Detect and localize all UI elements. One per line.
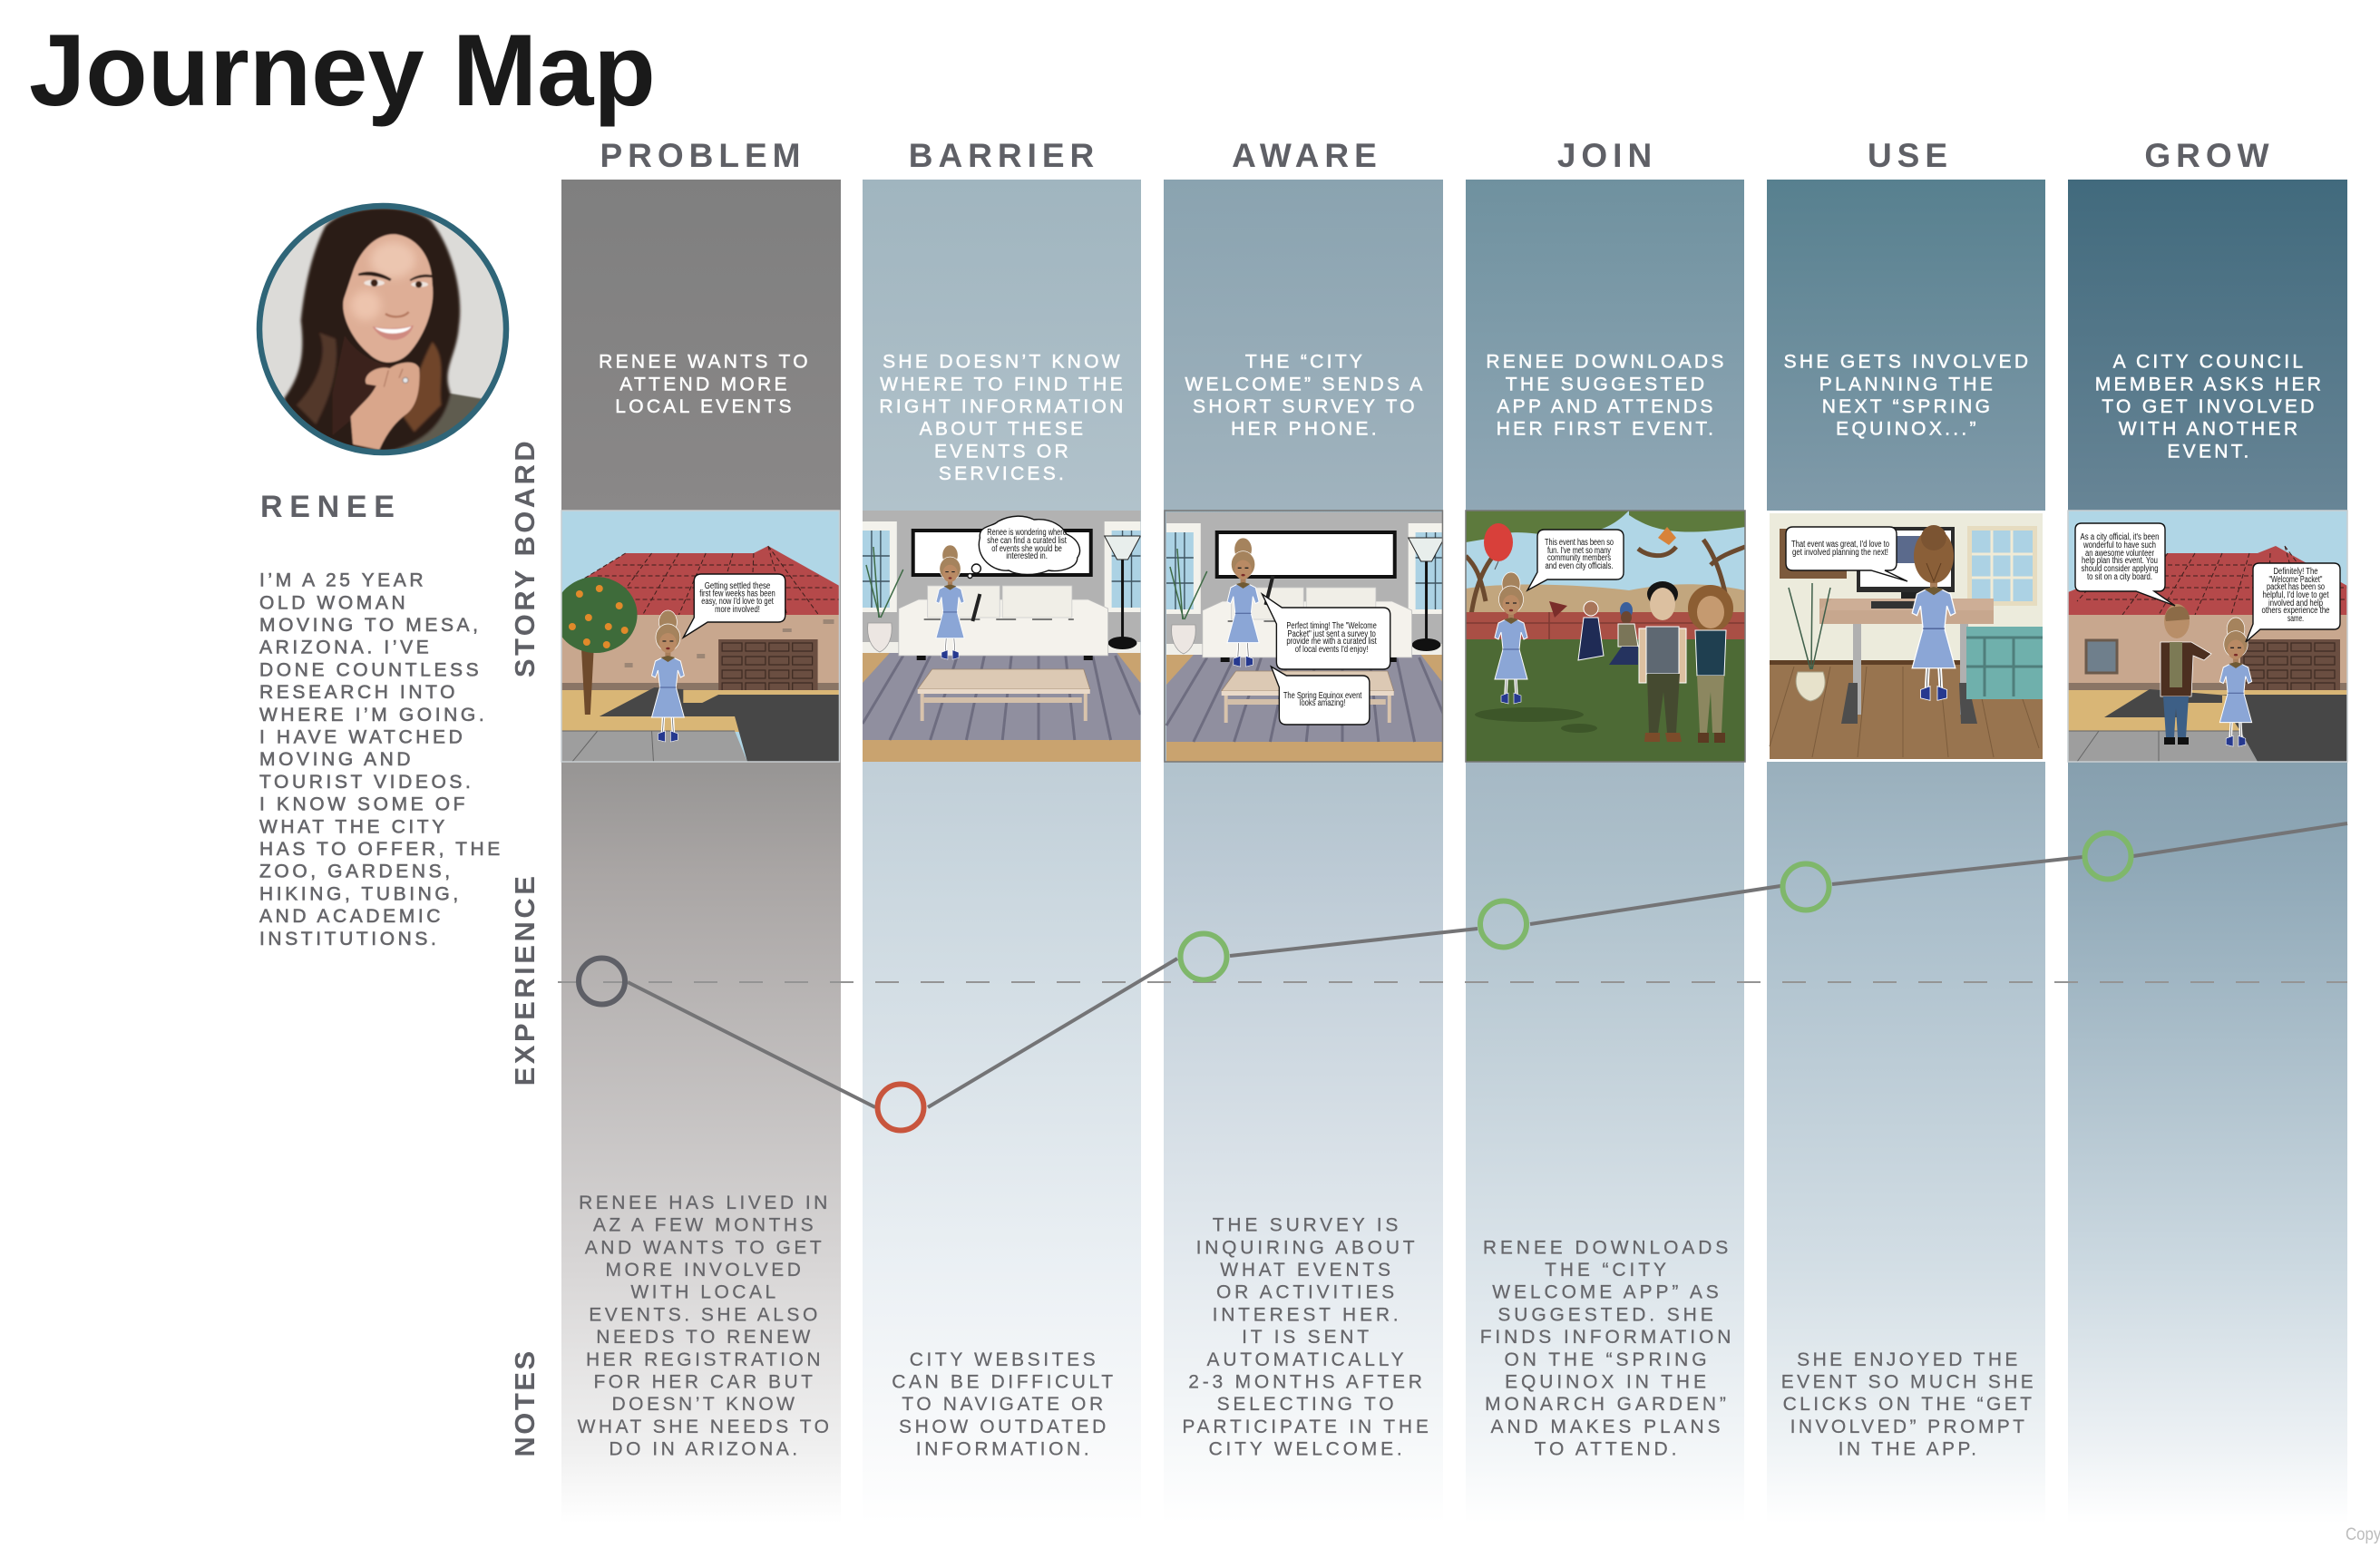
note: ON THE “SPRING — [1505, 1349, 1710, 1370]
chart: experience curve — [558, 823, 2347, 1130]
speech bubble: spring equinox: The Spring Equinox event — [1283, 691, 1362, 701]
note: AZ A FEW MONTHS — [593, 1215, 816, 1236]
speech bubble: first few weeks has been — [699, 589, 775, 599]
caption: HER PHONE. — [1231, 419, 1380, 440]
caption: LOCAL EVENTS — [615, 396, 795, 417]
standing woman — [1688, 585, 1733, 743]
note: OR ACTIVITIES — [1216, 1282, 1398, 1303]
caption: EQUINOX...” — [1836, 419, 1979, 440]
note: WITH LOCAL — [630, 1282, 779, 1303]
thought bubble — [968, 516, 1079, 579]
persona bio: I HAVE WATCHED — [259, 727, 465, 747]
caption — [1784, 352, 2031, 440]
speech bubble: Renee: others experience the — [2262, 606, 2330, 616]
storyboard: house, Renee settling in — [554, 511, 839, 762]
note: NEEDS TO RENEW — [596, 1327, 814, 1348]
note: SUGGESTED. SHE — [1497, 1304, 1717, 1325]
persona bio: HIKING, TUBING, — [259, 883, 462, 904]
caption: WHERE TO FIND THE — [880, 374, 1126, 394]
speech bubble: community members — [1547, 553, 1611, 563]
plant — [1789, 583, 1830, 701]
note: THE SURVEY IS — [1213, 1215, 1401, 1236]
persona bio: WHERE I’M GOING. — [259, 705, 487, 725]
character: city official — [2161, 604, 2211, 745]
heading: join: JOIN — [1557, 137, 1657, 174]
note: CITY WELCOME. — [1208, 1439, 1406, 1460]
note: SELECTING TO — [1217, 1394, 1397, 1415]
standing man — [1639, 581, 1686, 742]
marker: problem — [579, 958, 625, 1005]
speech bubble: more involved! — [715, 605, 760, 615]
balloon — [1484, 523, 1513, 570]
note: INFORMATION. — [916, 1439, 1092, 1460]
caption: NEXT “SPRING — [1822, 396, 1993, 417]
panel: join column — [1466, 137, 1744, 1524]
note: FINDS INFORMATION — [1480, 1327, 1734, 1348]
caption: RENEE WANTS TO — [599, 352, 811, 373]
note: CITY WEBSITES — [910, 1349, 1098, 1370]
note: SHE ENJOYED THE — [1797, 1349, 2021, 1370]
speech bubble: That event was great, I'd love to — [1791, 540, 1889, 550]
persona bio: I KNOW SOME OF — [259, 794, 468, 815]
speech bubble: official: help plan this event. You — [2082, 556, 2158, 566]
note: AND MAKES PLANS — [1491, 1417, 1723, 1437]
note: AND WANTS TO GET — [585, 1237, 824, 1258]
speech bubble: Renee: Definitely! The — [2273, 567, 2318, 577]
persona name: RENEE — [260, 490, 402, 524]
note: TO NAVIGATE OR — [902, 1394, 1107, 1415]
storyboard: office, planning — [1767, 511, 2046, 762]
column background — [1466, 180, 1744, 1524]
panel: problem column — [561, 137, 841, 1524]
marker: join — [1480, 901, 1527, 947]
caption: APP AND ATTENDS — [1497, 396, 1716, 417]
note: DO IN ARIZONA. — [609, 1439, 801, 1460]
caption: SHE GETS INVOLVED — [1784, 352, 2031, 373]
caption — [1185, 352, 1426, 440]
note: EVENTS. SHE ALSO — [589, 1304, 821, 1325]
note: RENEE DOWNLOADS — [1483, 1237, 1731, 1258]
speech bubble: survey: Packet" just sent a survey to — [1287, 629, 1376, 639]
persona bio — [259, 570, 503, 949]
speech bubble: Renee: helpful, I'd love to get — [2262, 590, 2329, 600]
caption: EVENT. — [2167, 441, 2252, 462]
persona bio: ARIZONA. I’VE — [259, 638, 432, 658]
note: IT IS SENT — [1242, 1327, 1372, 1348]
caption: SHE DOESN’T KNOW — [883, 352, 1123, 373]
persona bio: HAS TO OFFER, THE — [259, 839, 503, 860]
speech bubble: survey — [1262, 594, 1390, 669]
persona bio: TOURIST VIDEOS. — [259, 772, 473, 793]
row label: experience: EXPERIENCE — [509, 873, 541, 1086]
speech bubble: Renee: "Welcome Packet" — [2269, 575, 2323, 585]
speech bubble: survey: Perfect timing! The "Welcome — [1286, 621, 1377, 631]
speech bubble: spring equinox — [1271, 667, 1370, 725]
caption: PLANNING THE — [1819, 374, 1995, 394]
column background — [1164, 180, 1443, 1524]
character: Renee — [1495, 572, 1527, 704]
caption — [1486, 352, 1727, 440]
character: Renee — [2219, 618, 2252, 746]
note: PARTICIPATE IN THE — [1182, 1417, 1432, 1437]
persona bio: AND ACADEMIC — [259, 906, 444, 927]
note: WELCOME APP” AS — [1492, 1282, 1722, 1303]
caption — [599, 352, 811, 417]
speech bubble — [1786, 527, 1907, 581]
caption: MEMBER ASKS HER — [2095, 374, 2324, 394]
marker: aware — [1181, 934, 1226, 979]
note: DOESN’T KNOW — [612, 1394, 797, 1415]
note: IN THE APP. — [1839, 1439, 1979, 1460]
persona bio: INSTITUTIONS. — [259, 929, 439, 949]
thought bubble: of events she would be — [991, 544, 1062, 554]
speech bubble: survey: provide me with a curated list — [1286, 637, 1377, 647]
marker: grow — [2084, 833, 2131, 880]
caption: WITH ANOTHER — [2119, 419, 2300, 440]
persona bio: ZOO, GARDENS, — [259, 862, 454, 882]
persona bio: MOVING AND — [259, 749, 414, 770]
caption: HER FIRST EVENT. — [1497, 419, 1716, 440]
caption: SERVICES. — [939, 463, 1067, 484]
note: RENEE HAS LIVED IN — [579, 1193, 831, 1213]
note: SHOW OUTDATED — [899, 1417, 1109, 1437]
speech bubble — [683, 574, 785, 638]
caption: SHORT SURVEY TO — [1193, 396, 1418, 417]
note: WHAT EVENTS — [1220, 1260, 1394, 1280]
caption: RENEE DOWNLOADS — [1486, 352, 1727, 373]
heading: aware: AWARE — [1232, 137, 1382, 174]
note: AUTOMATICALLY — [1207, 1349, 1407, 1370]
note — [892, 1349, 1117, 1460]
persona bio: OLD WOMAN — [259, 592, 408, 613]
speech bubble: official — [2075, 523, 2175, 606]
caption: RIGHT INFORMATION — [879, 396, 1127, 417]
character: Renee from behind — [1912, 525, 1956, 700]
note: INTEREST HER. — [1213, 1304, 1401, 1325]
panel: barrier column — [863, 137, 1141, 1524]
caption: THE SUGGESTED — [1506, 374, 1707, 394]
speech bubble: and even city officials. — [1546, 561, 1613, 571]
note — [1182, 1215, 1432, 1460]
thought bubble: she can find a curated list — [987, 536, 1067, 546]
storyboard: house, council member — [2068, 511, 2356, 762]
row label: story board: STORY BOARD — [509, 438, 541, 677]
speech bubble: Renee: packet has been so — [2267, 582, 2325, 592]
heading: problem: PROBLEM — [600, 137, 805, 174]
speech bubble: Renee — [2246, 563, 2340, 642]
panel: persona — [259, 206, 506, 949]
speech bubble: easy, now I'd love to get — [701, 597, 774, 607]
note: INQUIRING ABOUT — [1196, 1237, 1418, 1258]
column background — [863, 180, 1141, 1524]
speech bubble: Renee: same. — [2287, 614, 2304, 624]
storyboard: living room, Renee wondering — [863, 511, 1140, 762]
column background — [2068, 180, 2347, 1524]
persona bio: RESEARCH INTO — [259, 682, 458, 703]
character: Renee — [936, 545, 964, 659]
caption: TO GET INVOLVED — [2102, 396, 2317, 417]
speech bubble: spring equinox: looks amazing! — [1300, 698, 1345, 708]
seated guests — [1578, 601, 1638, 665]
heading: barrier: BARRIER — [909, 137, 1099, 174]
note: HER REGISTRATION — [586, 1349, 824, 1370]
speech bubble: official: wonderful to have such — [2082, 540, 2156, 550]
note: INVOLVED” PROMPT — [1790, 1417, 2027, 1437]
speech bubble: This event has been so — [1545, 538, 1614, 548]
heading: use: USE — [1868, 137, 1953, 174]
caption: THE “CITY — [1245, 352, 1365, 373]
column background — [1767, 180, 2045, 1524]
note: MONARCH GARDEN” — [1485, 1394, 1730, 1415]
note: EVENT SO MUCH SHE — [1781, 1371, 2036, 1393]
character: Renee — [651, 610, 684, 742]
caption: A CITY COUNCIL — [2113, 352, 2306, 373]
speech bubble: official: should consider applying — [2081, 564, 2159, 574]
note: THE “CITY — [1545, 1260, 1670, 1280]
thought bubble: Renee is wondering where — [987, 528, 1067, 538]
caption: ATTEND MORE — [619, 374, 790, 394]
panel: use column — [1767, 137, 2045, 1524]
note: CAN BE DIFFICULT — [892, 1371, 1117, 1393]
caption: WELCOME” SENDS A — [1185, 374, 1426, 394]
note: WHAT SHE NEEDS TO — [578, 1417, 832, 1437]
note — [1480, 1237, 1734, 1460]
note — [1781, 1349, 2036, 1460]
persona bio: WHAT THE CITY — [259, 816, 448, 837]
character: Renee — [1227, 538, 1259, 667]
portrait photo — [259, 206, 506, 453]
column background — [561, 180, 841, 1524]
note: TO ATTEND. — [1535, 1439, 1680, 1460]
storyboard: living room, survey arrives — [1165, 511, 1444, 764]
caption: ABOUT THESE — [920, 419, 1086, 440]
marker: use — [1783, 863, 1829, 910]
speech bubble: survey: of local events I'd enjoy! — [1295, 645, 1368, 655]
speech bubble — [1527, 530, 1624, 590]
heading: grow: GROW — [2144, 137, 2275, 174]
caption — [879, 352, 1127, 484]
speech bubble: official: As a city official, it's been — [2081, 532, 2159, 542]
caption — [2095, 352, 2324, 462]
note: EQUINOX IN THE — [1505, 1371, 1710, 1393]
note — [578, 1193, 832, 1460]
note: FOR HER CAR BUT — [593, 1371, 816, 1393]
row label: notes: NOTES — [509, 1349, 541, 1457]
persona bio: MOVING TO MESA, — [259, 615, 482, 636]
speech bubble: Renee: involved and help — [2268, 599, 2323, 609]
panel: grow column — [2068, 137, 2347, 1524]
note: 2-3 MONTHS AFTER — [1188, 1371, 1426, 1393]
note: CLICKS ON THE “GET — [1783, 1394, 2034, 1415]
marker: barrier — [878, 1085, 923, 1130]
speech bubble: get involved planning the next! — [1792, 548, 1888, 558]
persona bio: I’M A 25 YEAR — [259, 570, 426, 591]
speech bubble: fun. I've met so many — [1547, 546, 1611, 556]
speech bubble: official: to sit on a city board. — [2087, 572, 2152, 582]
storyboard: park event — [1466, 511, 1745, 762]
persona bio: DONE COUNTLESS — [259, 659, 482, 680]
speech bubble: Getting settled these — [705, 581, 771, 591]
note: MORE INVOLVED — [606, 1260, 804, 1280]
speech bubble: official: an awesome volunteer — [2085, 549, 2154, 559]
title: Journey Map — [29, 14, 656, 127]
panel: aware column — [1164, 137, 1443, 1524]
caption: EVENTS OR — [934, 441, 1071, 462]
thought bubble: interested in. — [1006, 551, 1048, 561]
